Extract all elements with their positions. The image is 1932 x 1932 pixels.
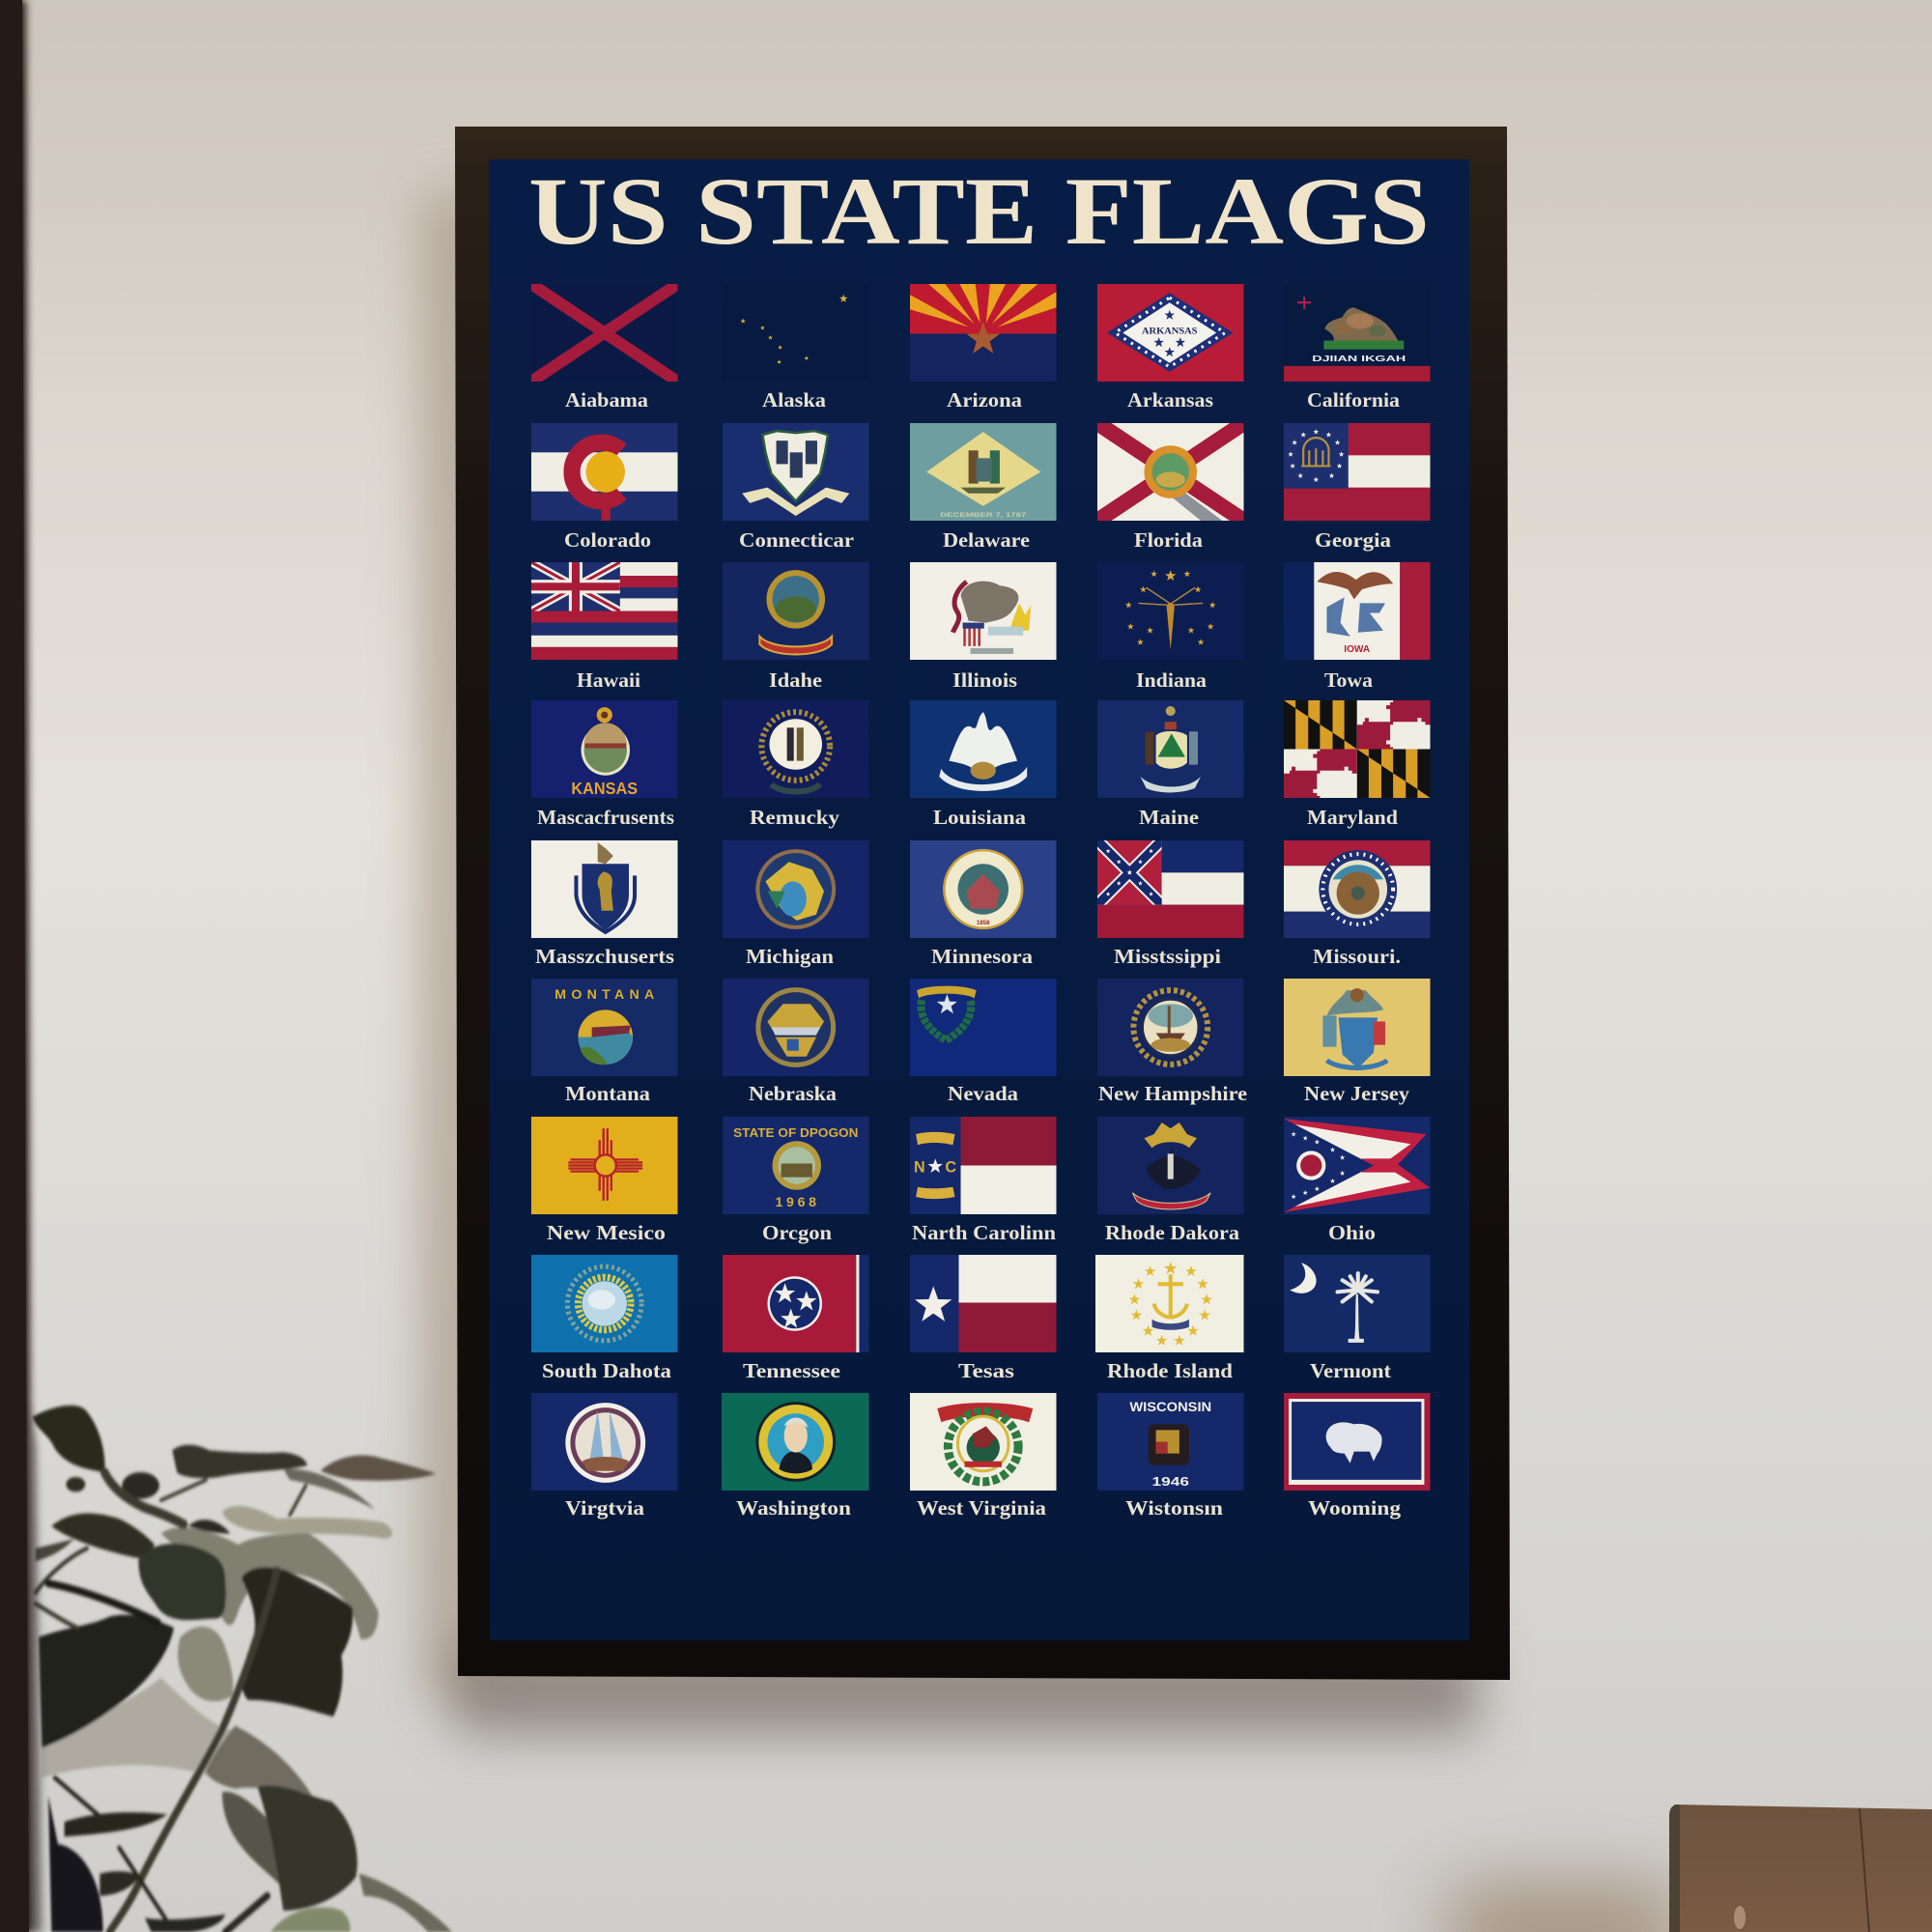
flag: Rhode Island — [1095, 1255, 1244, 1352]
flag: Delaware — [910, 423, 1057, 521]
label: Connecticut: Connecticar — [739, 528, 854, 552]
flag: Ohio — [1284, 1117, 1430, 1214]
label: Alabama: Aiabama — [565, 388, 648, 412]
flag: Nevada — [910, 979, 1057, 1076]
label: Alaska: Alaska — [762, 388, 826, 412]
label: Florida: Florida — [1134, 528, 1203, 552]
cell: Nebraska — [723, 979, 869, 1105]
warm haze beside furniture — [1449, 1884, 1681, 1932]
flag: West Virginia — [910, 1393, 1057, 1491]
flag: Wyoming — [1284, 1393, 1430, 1491]
flag: Iowa — [1284, 562, 1430, 660]
flag: Wisconsin: 1946 — [1152, 1474, 1189, 1489]
label: Massachusetts garbled: Mascacfrusents — [537, 806, 674, 829]
flag: California — [1284, 284, 1430, 382]
flag: North Carolina: N — [914, 1159, 925, 1177]
label: Montana: Montana — [565, 1082, 650, 1105]
flag: Indiana — [1097, 562, 1244, 660]
flag: New Jersey — [1284, 979, 1430, 1076]
label: Hawaii: Hawaii — [577, 668, 640, 692]
flag: Florida — [1097, 423, 1244, 521]
flag: Massachusetts — [531, 840, 678, 938]
flag: Colorado — [531, 423, 678, 521]
cell: Maryland — [1284, 700, 1430, 829]
flag: Alaska — [723, 284, 869, 382]
cell: Illinois — [910, 562, 1057, 692]
flag: Idaho — [723, 562, 869, 660]
flag: Tennessee — [723, 1255, 869, 1352]
cell: Kansas — [531, 700, 678, 829]
cell: Wisconsin — [1097, 1393, 1244, 1520]
label: Delaware: Delaware — [943, 528, 1030, 552]
label: Virginia: Virgtvia — [565, 1496, 644, 1520]
flag: Minnesota — [910, 840, 1057, 938]
flag: California: DJIIAN IKGAH — [1312, 354, 1406, 363]
label: Missouri: Missouri. — [1313, 945, 1401, 968]
cell: Oregon — [723, 1117, 869, 1244]
cell: Nevada — [910, 979, 1057, 1105]
cell: South Carolina flag labelled Vermont — [1284, 1255, 1430, 1382]
label: Idaho: Idahe — [769, 668, 822, 692]
flag: South Carolina — [1284, 1255, 1430, 1352]
cell: Montana — [531, 979, 678, 1105]
label: Nevada: Nevada — [948, 1082, 1018, 1105]
flag: South Dakota — [531, 1255, 678, 1352]
cell: Rhode Dakora — [1097, 1117, 1244, 1244]
flag: North Dakota — [1097, 1117, 1244, 1214]
flag: Nebraska — [723, 979, 869, 1076]
flag: Louisiana — [910, 700, 1057, 798]
flag: New Hampshire — [1097, 979, 1244, 1076]
flag: Hawaii — [531, 562, 678, 660]
label: Maine: Maine — [1139, 806, 1199, 829]
label: Vermont: Vernıont — [1310, 1359, 1392, 1382]
label: Wyoming: Wooming — [1308, 1496, 1401, 1520]
label: North Carolina: Narth Carolinn — [912, 1221, 1056, 1244]
cell: Iowa — [1284, 562, 1430, 692]
poster panel — [489, 159, 1469, 1640]
cell: Ohio — [1284, 1117, 1430, 1244]
label: Rhode Island: Rhode Island — [1107, 1359, 1233, 1382]
cell: Texas — [910, 1255, 1057, 1382]
label: Washington: Washington — [736, 1496, 851, 1520]
label: Michigan: Michigan — [746, 945, 834, 968]
label: Massachusetts: Masszchuserts — [535, 945, 674, 968]
flag: Mississippi — [1097, 840, 1244, 938]
label: Indiana: Indiana — [1136, 668, 1207, 692]
flag: Connecticut — [723, 423, 869, 521]
dark door frame at left edge — [0, 0, 43, 1932]
flag: Washington — [722, 1393, 869, 1491]
cell: Massachusetts — [531, 840, 678, 968]
flag: Oregon — [723, 1117, 869, 1214]
flag: Oregon: STATE OF DPOGON — [733, 1125, 858, 1140]
flag: Michigan — [723, 840, 869, 938]
flag: North Carolina — [910, 1117, 1057, 1214]
frame — [455, 127, 1510, 1680]
label: California: California — [1307, 388, 1400, 412]
cell: Minnesota — [910, 840, 1057, 968]
flag: Arkansas — [1097, 284, 1244, 382]
cell: Louisiana — [910, 700, 1057, 829]
cell: California — [1284, 284, 1430, 412]
flag: Kentucky — [723, 700, 869, 798]
label: West Virginia: West Virginia — [917, 1496, 1046, 1520]
label: Georgia: Georgia — [1315, 528, 1391, 552]
flag: Alabama — [531, 284, 678, 382]
wooden furniture — [1669, 1804, 1932, 1932]
frame shadow — [425, 193, 1478, 1734]
flag: Kansas: KANSAS — [571, 779, 638, 798]
label: Louisiana: Louisiana — [933, 806, 1026, 829]
flag: Montana — [531, 979, 678, 1076]
cell: Kentucky — [723, 700, 869, 829]
label: Tennessee: Tennessee — [743, 1359, 840, 1382]
flag: New Mexico — [531, 1117, 678, 1214]
label: Mississippi: Misstssippi — [1114, 945, 1221, 968]
flag: Maine — [1097, 700, 1244, 798]
flag: Texas — [910, 1255, 1057, 1352]
cell: Arkansas — [1097, 284, 1244, 412]
flag: North Carolina: C — [945, 1159, 956, 1177]
label: Illinois: Illinois — [952, 668, 1017, 692]
flag: Illinois — [910, 562, 1057, 660]
flag: Oregon: 1968 — [776, 1194, 816, 1209]
title: US STATE FLAGS — [528, 157, 1430, 265]
cell: Alaska — [723, 284, 869, 412]
label: Minnesota: Minnesora — [931, 945, 1033, 968]
label: New Mexico: New Mesico — [547, 1221, 666, 1244]
label: Ohio: Ohio — [1328, 1221, 1376, 1244]
cell: New Hampshire — [1097, 979, 1247, 1105]
label: Wisconsin: Wistonsın — [1125, 1496, 1223, 1520]
cell: New Jersey — [1284, 979, 1430, 1105]
cell: Washington — [722, 1393, 869, 1520]
cell: Connecticut — [723, 423, 869, 552]
label: Kentucky: Remucky — [750, 806, 839, 829]
label: Maryland: Maryland — [1307, 806, 1398, 829]
flag: Montana: MONTANA — [554, 986, 654, 1002]
cell: Wyoming — [1284, 1393, 1430, 1520]
cell: Michigan — [723, 840, 869, 968]
flag: Minnesota: 1858 — [977, 921, 990, 926]
label: New Jersey: New Jersey — [1304, 1082, 1409, 1105]
cell: Georgia — [1284, 423, 1430, 552]
label: Texas: Tesas — [958, 1359, 1014, 1382]
flag: Arizona — [910, 284, 1057, 382]
cell: Alabama — [531, 284, 678, 412]
flag: Arkansas: ARKANSAS — [1142, 327, 1198, 336]
label: Rhode Dakora: Rhode Dakora — [1105, 1221, 1239, 1244]
label: Colorado: Colorado — [564, 528, 651, 552]
flag: Kansas — [531, 700, 678, 798]
cell: Tennessee — [723, 1255, 869, 1382]
flag: Georgia — [1284, 423, 1430, 521]
label: New Hampshire: New Hampshire — [1098, 1082, 1247, 1105]
cell: Florida — [1097, 423, 1244, 552]
poster in frame — [455, 127, 1510, 1680]
flag: Virginia — [531, 1393, 678, 1491]
cell: Indiana — [1097, 562, 1244, 692]
cell: Missouri — [1284, 840, 1430, 968]
flag: Iowa: IOWA — [1344, 644, 1371, 655]
flag: Wisconsin: WISCONSIN — [1129, 1399, 1211, 1414]
flag: Maryland — [1284, 700, 1430, 798]
cell: Colorado — [531, 423, 678, 552]
cell: West Virginia — [910, 1393, 1057, 1520]
cell: Virginia — [531, 1393, 678, 1520]
label: South Dakota: South Dahota — [542, 1359, 671, 1382]
cell: South Dakota — [531, 1255, 678, 1382]
cell: Idaho — [723, 562, 869, 692]
label: Nebraska: Nebraska — [749, 1082, 837, 1105]
flag: Wisconsin — [1097, 1393, 1244, 1491]
cell: Hawaii — [531, 562, 678, 692]
label: Arkansas: Arkansas — [1127, 388, 1213, 412]
cell: Delaware — [910, 423, 1057, 552]
label: Oregon: Orcgon — [762, 1221, 832, 1244]
flag: Missouri — [1284, 840, 1430, 938]
cell: New Mexico — [531, 1117, 678, 1244]
cell: Mississippi — [1097, 840, 1244, 968]
cell: North Carolina — [910, 1117, 1057, 1244]
cell: Rhode Island — [1095, 1255, 1244, 1382]
label: Iowa: Towa — [1324, 668, 1373, 692]
cell: Arizona — [910, 284, 1057, 412]
label: Arizona: Arizona — [947, 388, 1022, 412]
cell: Maine — [1097, 700, 1244, 829]
plant — [32, 1406, 452, 1932]
flag: Delaware: DECEMBER 7, 1787 — [940, 513, 1027, 519]
